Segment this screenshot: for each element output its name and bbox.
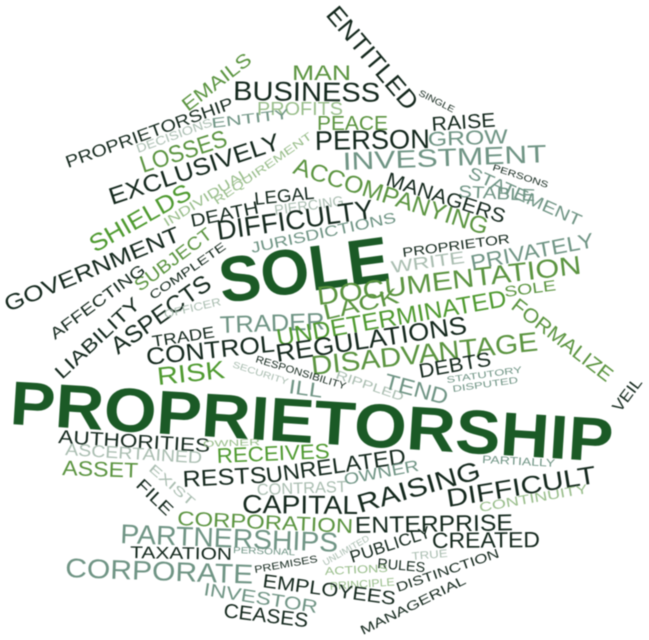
word: LOSSES: LOSSES [137, 125, 230, 179]
word: UNLIMITED: UNLIMITED [321, 533, 371, 568]
word: TRUE: TRUE [411, 548, 448, 563]
word: PERSON: PERSON [315, 124, 430, 156]
word: FORMALIZE: FORMALIZE [507, 295, 617, 387]
word: CONTROL: CONTROL [145, 331, 276, 371]
word: PARTNERSHIPS: PARTNERSHIPS [120, 519, 339, 558]
word: TEND: TEND [382, 369, 451, 410]
word: AFFECTING: AFFECTING [47, 262, 149, 343]
word: ACTIONS: ACTIONS [325, 563, 388, 578]
word: LIABILITY: LIABILITY [51, 294, 145, 384]
word: PARTIALLY: PARTIALLY [482, 454, 556, 470]
word: PROPRIETORSHIP large: PROPRIETORSHIP [8, 369, 615, 476]
word: ACCOMPANYING: ACCOMPANYING [290, 153, 492, 241]
word: CREATED: CREATED [432, 527, 540, 553]
word: EMAILS: EMAILS [178, 49, 256, 116]
word: COMPLETE: COMPLETE [147, 239, 228, 302]
word: OFFICER: OFFICER [163, 296, 222, 321]
word: PROFITS: PROFITS [257, 99, 343, 119]
word: RESTS: RESTS [182, 462, 267, 492]
word: OWNER small: OWNER [203, 437, 261, 449]
word: EXCLUSIVELY: EXCLUSIVELY [105, 129, 284, 211]
word: MANAGERS: MANAGERS [383, 169, 508, 228]
word: DECISIONS: DECISIONS [134, 115, 214, 156]
word: REQUIREMENT: REQUIREMENT [212, 130, 315, 207]
word: CAPITAL: CAPITAL [242, 489, 358, 520]
word: PROPRIETORSHIP small: PROPRIETORSHIP [63, 94, 236, 172]
word: CORPORATE: CORPORATE [65, 553, 254, 590]
word: CONTINUITY: CONTINUITY [478, 481, 589, 515]
word: PROPRIETOR: PROPRIETOR [401, 231, 510, 260]
word: RISK: RISK [156, 356, 227, 391]
word: DISPUTED: DISPUTED [452, 375, 519, 394]
word: CORPORATION: CORPORATION [177, 508, 354, 538]
word: AUTHORITIES: AUTHORITIES [58, 427, 211, 457]
word: FILE: FILE [132, 475, 177, 519]
word: STABLE: STABLE [458, 182, 536, 205]
word: GOVERNMENT: GOVERNMENT [0, 222, 184, 317]
word: STATEMENT: STATEMENT [465, 163, 585, 230]
word: PERSONAL: PERSONAL [233, 545, 295, 557]
word: PUBLICLY: PUBLICLY [347, 523, 433, 567]
word: ENTITLED: ENTITLED [320, 1, 424, 116]
word: SOLE small: SOLE [503, 277, 557, 301]
word: INVESTMENT: INVESTMENT [342, 140, 547, 176]
word: RAISE: RAISE [431, 110, 496, 136]
word: UNRELATED: UNRELATED [264, 444, 407, 488]
word: CEASES: CEASES [222, 600, 309, 632]
word: JURISDICTIONS: JURISDICTIONS [249, 210, 398, 257]
word: IL: ILL [287, 376, 324, 403]
word: EMPLOYEES: EMPLOYEES [261, 571, 397, 610]
word: ENTERPRISE: ENTERPRISE [355, 509, 513, 538]
word: MAN: MAN [292, 62, 351, 85]
word: DOCUMENTATION: DOCUMENTATION [315, 250, 583, 311]
word: DEBTS: DEBTS [417, 349, 493, 383]
word: SECURITY: SECURITY [231, 359, 290, 387]
word: PREMISES: PREMISES [254, 554, 319, 576]
word: MANAGERIAL: MANAGERIAL [358, 573, 468, 638]
word: SHIELDS: SHIELDS [85, 179, 196, 258]
word: GROW: GROW [427, 126, 508, 151]
word: RAISING: RAISING [353, 455, 484, 519]
word: DISADVANTAGE: DISADVANTAGE [309, 327, 539, 381]
word: RECEIVES: RECEIVES [216, 440, 330, 468]
word: REGULATIONS: REGULATIONS [274, 311, 469, 368]
word: LEGAL: LEGAL [253, 183, 315, 209]
word: PERSONS: PERSONS [491, 162, 550, 190]
word: SOLE: SOLE [214, 223, 393, 317]
word: DIFFICULT: DIFFICULT [444, 461, 598, 513]
word: CONTRAST: CONTRAST [257, 479, 347, 499]
word: WRITE: WRITE [390, 248, 466, 277]
word: PRIVATELY: PRIVATELY [469, 229, 596, 275]
word: DEATH: DEATH [189, 197, 260, 231]
word: PEACE: PEACE [317, 113, 388, 135]
word: VEIL: VEIL [610, 375, 646, 415]
word: DIFFICULTY: DIFFICULTY [215, 194, 375, 246]
word: RESPONSIBILITY: RESPONSIBILITY [254, 354, 348, 392]
word: RIPPLED: RIPPLED [334, 368, 406, 404]
word: BUSINESS: BUSINESS [233, 76, 380, 108]
word: PRINCIPLE: PRINCIPLE [329, 576, 395, 593]
word: ASSET: ASSET [62, 457, 139, 483]
word: TRADE: TRADE [151, 324, 216, 351]
word: ASPECTS: ASPECTS [106, 270, 217, 360]
word: TAXATION: TAXATION [130, 543, 232, 564]
word: INDIVIDUAL: INDIVIDUAL [161, 165, 252, 230]
word: PIERCING: PIERCING [273, 192, 345, 218]
word: TRADER: TRADER [219, 308, 325, 339]
word: DISTINCTION: DISTINCTION [394, 545, 501, 595]
word: ENTITY: ENTITY [210, 105, 291, 131]
word: SUBJECT: SUBJECT [130, 224, 216, 295]
word: EXIST: EXIST [146, 461, 198, 509]
word: INVESTOR: INVESTOR [202, 579, 319, 617]
word: SINGLE: SINGLE [417, 88, 456, 114]
word: OWNER: OWNER [343, 458, 420, 489]
word: LACK: LACK [321, 283, 402, 325]
word: STATUTORY: STATUTORY [446, 365, 523, 385]
word: ASCERTAINED: ASCERTAINED [65, 440, 203, 467]
word: UNDETERMINATED: UNDETERMINATED [274, 285, 509, 352]
word: RULES: RULES [377, 555, 426, 575]
